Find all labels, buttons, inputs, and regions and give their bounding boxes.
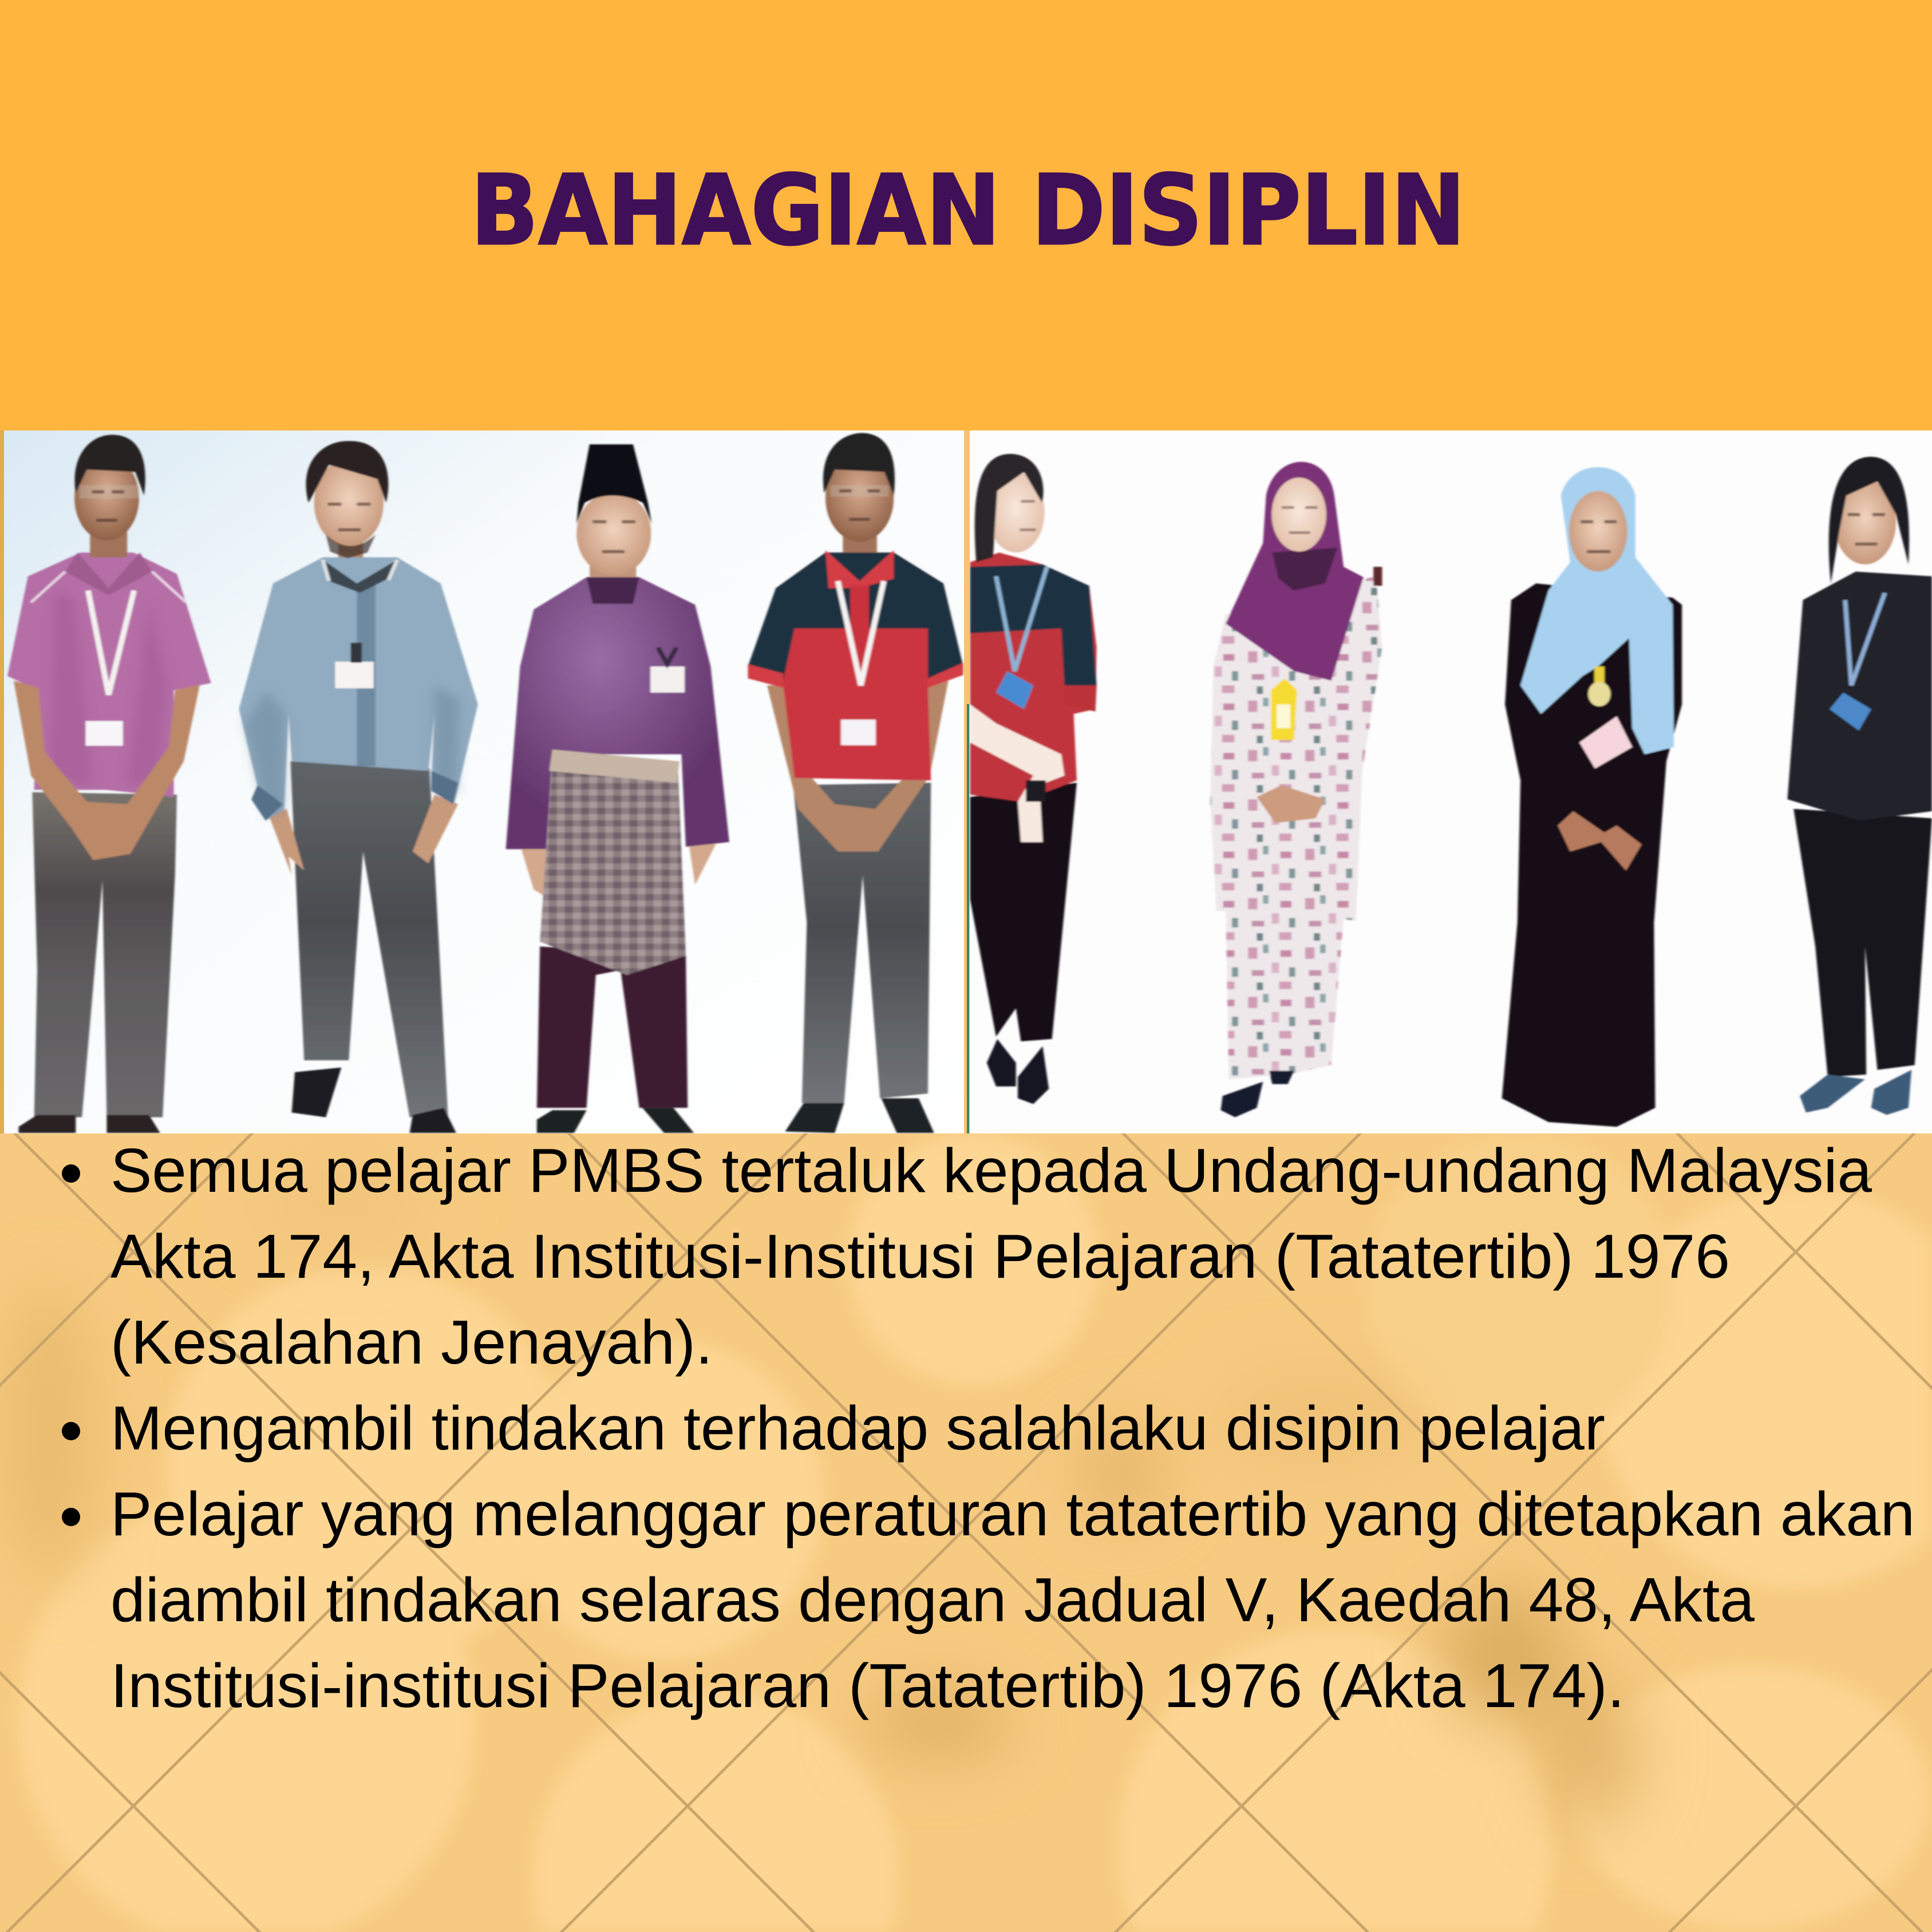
bullet list xyxy=(62,1136,1915,1721)
figure: woman in blue hijab and black dress xyxy=(1502,467,1682,1127)
bullet 1 xyxy=(62,1136,1872,1377)
bullet 1: Semua pelajar PMBS tertaluk kepada Undang-undang Malaysia xyxy=(110,1136,1872,1206)
bullet 3: Pelajar yang melanggar peraturan tatatertib yang ditetapkan akan xyxy=(110,1480,1915,1549)
patterned background panel xyxy=(0,1133,1932,1932)
bullet 3: diambil tindakan selaras dengan Jadual V, Kaedah 48, Akta xyxy=(110,1566,1755,1635)
figure: man in pink polo xyxy=(7,434,211,1133)
bullet 3 xyxy=(62,1480,1915,1721)
bullet 1: Akta 174, Akta Institusi-Institusi Pelajaran (Tatatertib) 1976 xyxy=(110,1222,1730,1291)
photo: male uniforms xyxy=(4,430,964,1133)
figure: woman in red and black shirt xyxy=(970,454,1097,1104)
header band xyxy=(0,0,1932,430)
bullet 2: Mengambil tindakan terhadap salahlaku disipin pelajar xyxy=(110,1394,1605,1463)
photo: female uniforms xyxy=(970,430,1932,1133)
figure: man in baju melayu xyxy=(506,444,729,1133)
photo gap divider xyxy=(964,430,970,1133)
figure: man in blue shirt xyxy=(239,441,478,1133)
title: BAHAGIAN DISIPLIN xyxy=(471,154,1465,267)
left strip xyxy=(0,430,4,1133)
figure: man in red and black shirt xyxy=(748,433,963,1133)
bullet 3: Institusi-institusi Pelajaran (Tatatertib) 1976 (Akta 174). xyxy=(110,1652,1625,1721)
bullet 1: (Kesalahan Jenayah). xyxy=(110,1308,713,1377)
figure: woman in floral baju kurung xyxy=(1210,462,1382,1117)
figure: woman in black shirt xyxy=(1787,457,1932,1115)
